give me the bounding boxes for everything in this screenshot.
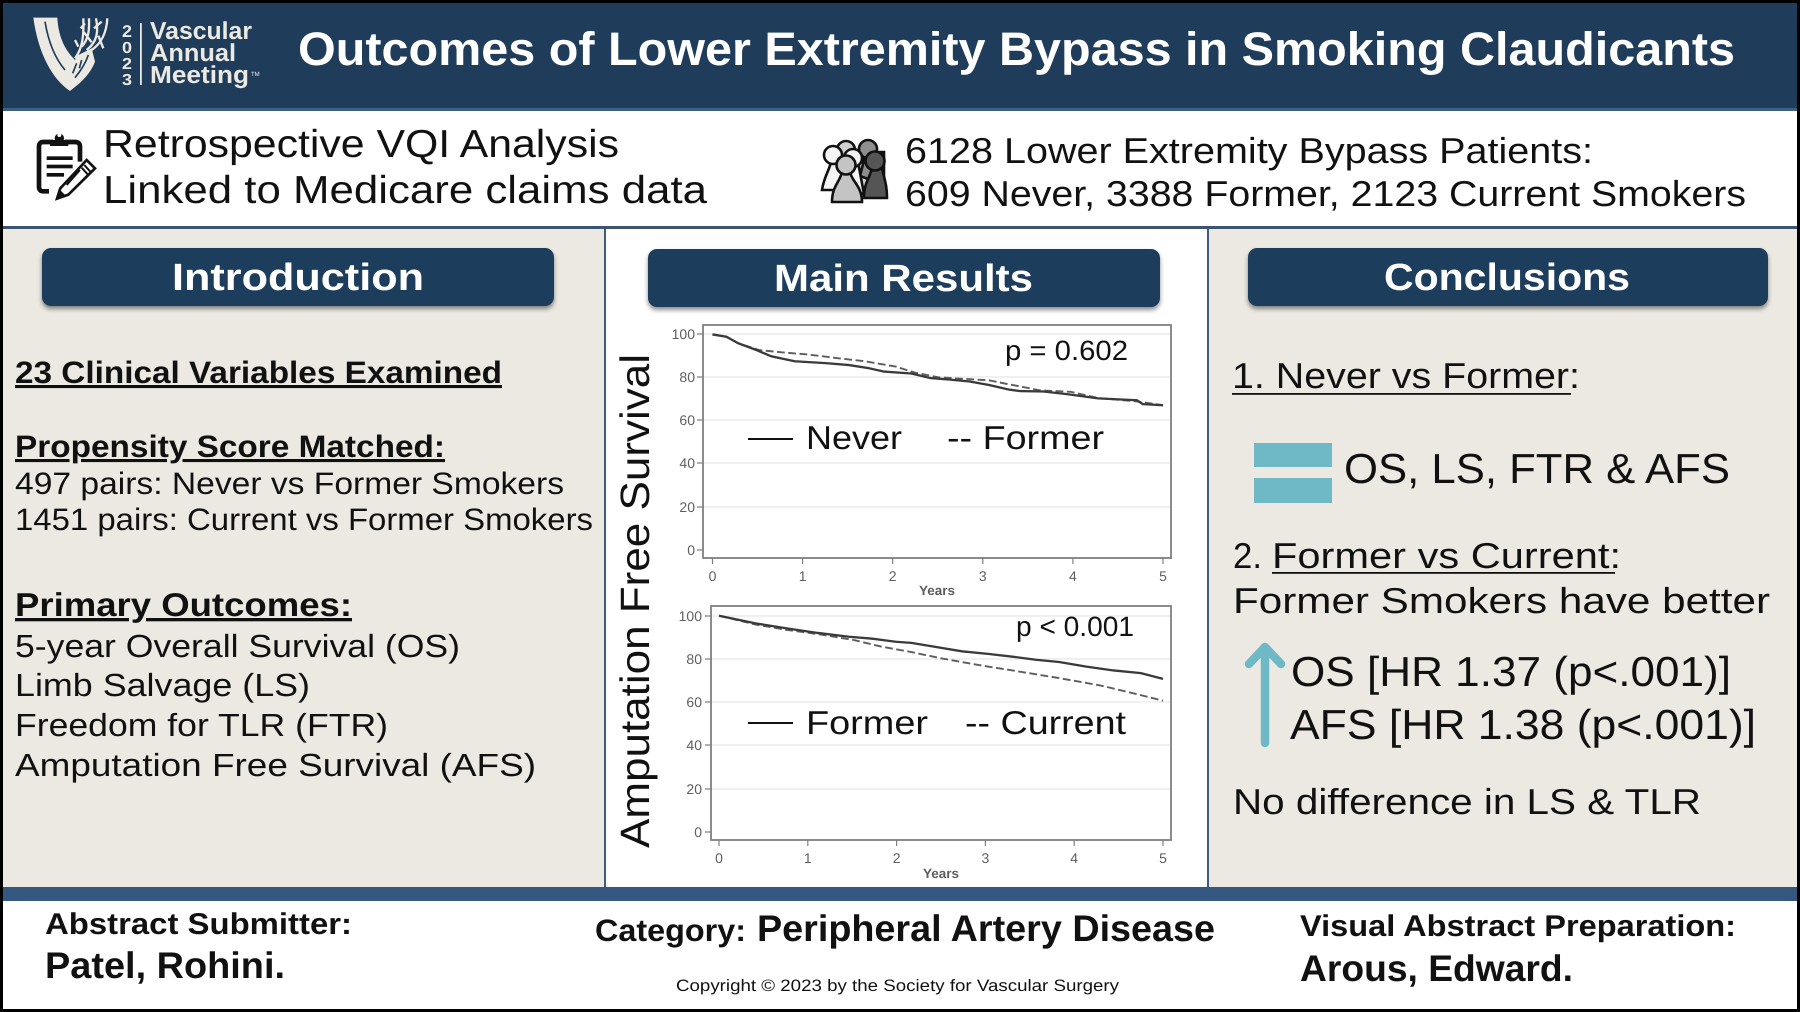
chart: former vs current survival: 4 [1070, 850, 1078, 866]
no difference text: No difference in LS & TLR [1233, 781, 1701, 822]
propensity score matching: 497 pairs: Never vs Former Smokers [15, 466, 564, 501]
chart: never vs former survival: 0 [709, 568, 717, 584]
abstract submitter: Patel, Rohini. [45, 945, 285, 986]
patient counts text: 6128 Lower Extremity Bypass Patients: [905, 130, 1593, 171]
study type text: Linked to Medicare claims data [103, 169, 707, 212]
header banner [3, 3, 1797, 111]
propensity score matching: Propensity Score Matched: [15, 429, 445, 464]
category: Category: [595, 913, 746, 948]
primary outcomes: Amputation Free Survival (AFS) [15, 747, 536, 783]
primary outcomes: 5-year Overall Survival (OS) [15, 628, 460, 664]
logo: 2023 Vascular Annual Meeting: 3 [122, 72, 132, 89]
icon: clipboard and pencil [39, 133, 95, 199]
heading: main results: Main Results [774, 258, 1033, 300]
chart: never vs former survival: 40 [679, 455, 695, 471]
logo: 2023 Vascular Annual Meeting: 2 [122, 56, 132, 73]
study type text [103, 123, 707, 212]
abstract submitter [45, 908, 352, 986]
chart: former vs current survival: Years [923, 866, 959, 881]
title: Outcomes of Lower Extremity Bypass in Smoking Claudicants [298, 22, 1735, 75]
logo: 2023 Vascular Annual Meeting: 0 [122, 40, 132, 57]
heading: main results [648, 249, 1160, 307]
y axis title: Amputation Free Survival [612, 354, 658, 848]
conclusion 2 heading: Former Smokers have better [1233, 580, 1770, 621]
chart: former vs current survival: 3 [982, 850, 990, 866]
primary outcomes [15, 586, 536, 783]
logo: 2023 Vascular Annual Meeting [33, 18, 260, 91]
logo: 2023 Vascular Annual Meeting: Annual [150, 40, 236, 67]
study type text: Retrospective VQI Analysis [103, 123, 619, 166]
logo: 2023 Vascular Annual Meeting: Vascular [150, 18, 252, 45]
icon: group of people [822, 140, 887, 202]
visual abstract preparation: Visual Abstract Preparation: [1300, 910, 1736, 943]
primary outcomes: Primary Outcomes: [15, 586, 352, 623]
variables examined: 23 Clinical Variables Examined [15, 355, 502, 390]
chart: never vs former survival: 1 [799, 568, 807, 584]
footer credits [45, 908, 1736, 995]
chart: never vs former survival: p = 0.602 [1005, 335, 1128, 366]
chart: never vs former survival [672, 325, 1171, 598]
panel: conclusions [1209, 229, 1797, 887]
chart: former vs current survival: 1 [804, 850, 812, 866]
panel: main results [604, 229, 1209, 887]
chart: former vs current survival: 5 [1159, 850, 1167, 866]
category: Peripheral Artery Disease [757, 908, 1215, 949]
chart: former vs current survival: 80 [686, 651, 702, 667]
chart: former vs current survival: 2 [893, 850, 901, 866]
chart: former vs current survival: 0 [694, 824, 702, 840]
hazard ratios: AFS [HR 1.38 (p<.001)] [1290, 701, 1756, 748]
chart: former vs current survival: 100 [679, 608, 702, 624]
chart: never vs former survival: 4 [1069, 568, 1077, 584]
hazard ratios: OS [HR 1.37 (p<.001)] [1291, 648, 1731, 695]
chart: never vs former survival: 60 [679, 412, 695, 428]
propensity score matching [15, 429, 593, 537]
visual abstract preparation [1300, 910, 1736, 989]
chart: former vs current survival: 20 [686, 781, 702, 797]
logo: 2023 Vascular Annual Meeting: TM [251, 71, 260, 78]
conclusion 2 heading: 2. [1233, 535, 1262, 576]
chart: never vs former survival: 2 [889, 568, 897, 584]
propensity score matching: 1451 pairs: Current vs Former Smokers [15, 502, 593, 537]
chart: never vs former survival: 3 [979, 568, 987, 584]
footer divider band [3, 887, 1797, 901]
chart: former vs current survival: 40 [686, 737, 702, 753]
copyright: Copyright © 2023 by the Society for Vascular Surgery [676, 977, 1120, 995]
chart: former vs current survival: 0 [715, 850, 723, 866]
chart: former vs current survival: 60 [686, 694, 702, 710]
chart: never vs former survival: Never [806, 419, 902, 456]
hazard ratios [1290, 648, 1756, 748]
chart: never vs former survival: Years [919, 583, 955, 598]
chart: never vs former survival: 5 [1159, 568, 1167, 584]
conclusion 2 heading [1233, 535, 1770, 621]
patient counts text [905, 130, 1746, 214]
study design strip [3, 111, 1797, 229]
panel: introduction [3, 229, 604, 887]
logo: 2023 Vascular Annual Meeting: 2 [122, 22, 132, 41]
conclusion 1 heading: 1. Never vs Former: [1232, 355, 1580, 396]
chart: former vs current survival: p < 0.001 [1016, 611, 1134, 642]
heading: introduction: Introduction [172, 257, 424, 299]
heading: introduction [42, 248, 554, 306]
chart: former vs current survival: -- Current [965, 704, 1126, 741]
chart: never vs former survival: -- Former [947, 419, 1104, 456]
primary outcomes: Freedom for TLR (FTR) [15, 707, 388, 743]
equal outcomes text: OS, LS, FTR & AFS [1344, 445, 1730, 492]
patient counts text: 609 Never, 3388 Former, 2123 Current Smokers [905, 173, 1746, 214]
conclusion 2 heading: Former vs Current: [1272, 535, 1621, 576]
abstract submitter: Abstract Submitter: [45, 908, 352, 941]
chart: never vs former survival: 20 [679, 499, 695, 515]
chart: never vs former survival: 100 [672, 326, 695, 342]
chart: former vs current survival: Former [806, 704, 928, 741]
chart: never vs former survival: 0 [687, 542, 695, 558]
arrow: up teal [1249, 647, 1281, 743]
heading: conclusions: Conclusions [1384, 257, 1630, 299]
visual abstract preparation: Arous, Edward. [1300, 948, 1573, 989]
primary outcomes: Limb Salvage (LS) [15, 667, 310, 703]
icon: equals sign [1254, 443, 1332, 503]
heading: conclusions [1248, 248, 1768, 306]
chart: never vs former survival: 80 [679, 369, 695, 385]
chart: former vs current survival [679, 606, 1171, 881]
logo: 2023 Vascular Annual Meeting: Meeting [150, 62, 249, 89]
